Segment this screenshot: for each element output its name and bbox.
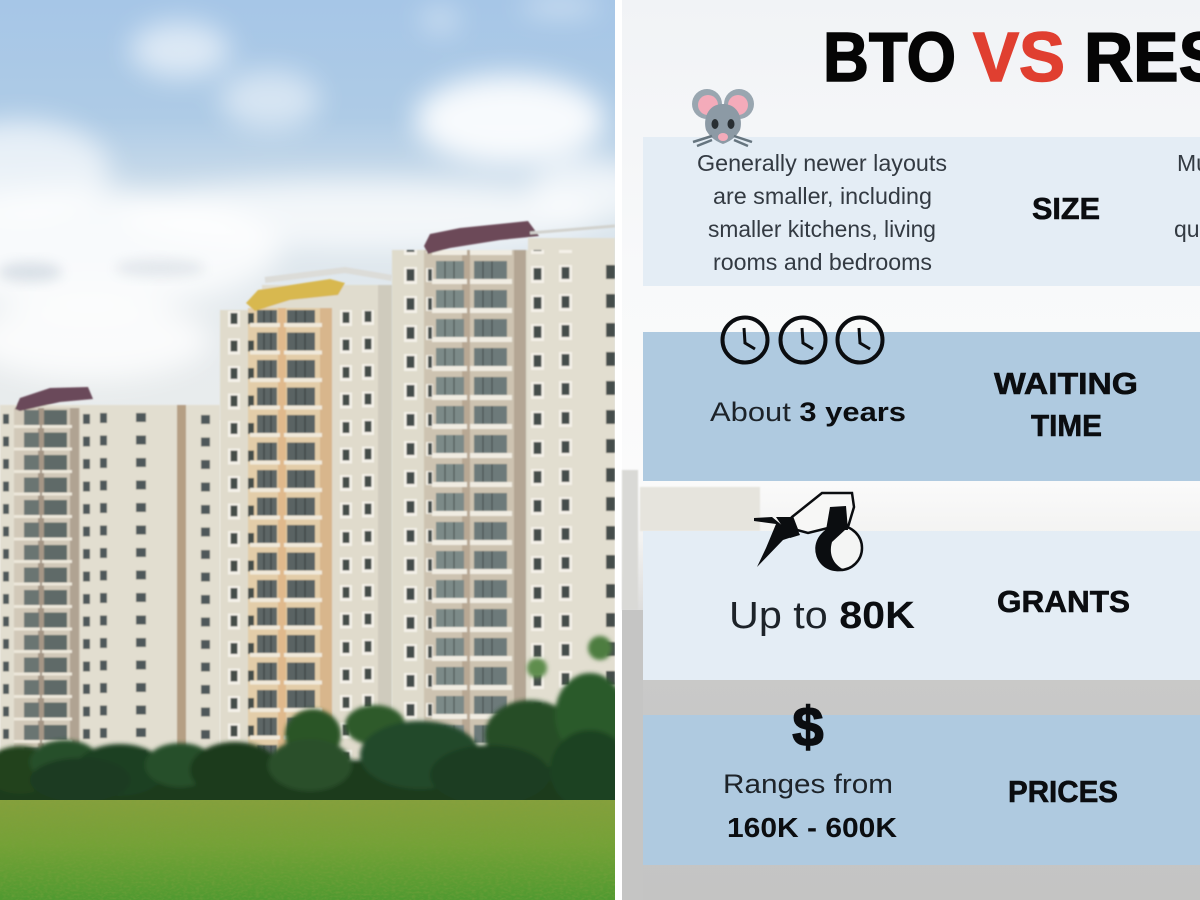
icon: dollar sign: $ <box>792 695 824 758</box>
text: waiting time BTO: About 3 years <box>710 397 906 427</box>
sky with clouds <box>0 0 650 420</box>
heading: waiting time <box>994 366 1138 443</box>
heading: grants: GRANTS <box>997 584 1130 619</box>
text: size BTO: smaller kitchens, living <box>708 216 936 242</box>
title: BTO <box>823 18 956 96</box>
row panel: grants <box>643 531 1200 680</box>
trees <box>0 636 630 810</box>
text: grants BTO: Up to 80K <box>729 595 916 637</box>
icon: mouse <box>692 89 754 146</box>
text: prices BTO: 160K - 600K <box>727 812 897 843</box>
text: size BTO <box>697 150 947 275</box>
text: size BTO: are smaller, including <box>713 183 932 209</box>
text: size resale (cropped) <box>1174 150 1200 242</box>
title <box>823 18 1200 96</box>
icon: hand holding money bag <box>754 493 862 571</box>
text: prices BTO <box>723 769 897 843</box>
tower block centre <box>220 270 392 760</box>
heading: prices: PRICES <box>1008 774 1118 809</box>
text: prices BTO: Ranges from <box>723 769 893 799</box>
icon: three clocks <box>722 318 882 362</box>
heading: waiting time: WAITING <box>994 366 1138 401</box>
heading: size: SIZE <box>1032 191 1100 226</box>
title: VS <box>973 18 1065 96</box>
text: size BTO: Generally newer layouts <box>697 150 947 176</box>
row panel: waiting time <box>643 332 1200 481</box>
row panel: size <box>643 137 1200 286</box>
row panel: prices <box>643 715 1200 865</box>
heading: waiting time: TIME <box>1031 408 1102 443</box>
tower block left <box>0 387 220 760</box>
tower block right <box>392 221 615 760</box>
photo: residential tower blocks <box>0 0 650 900</box>
grass field <box>0 800 615 900</box>
text: size BTO: rooms and bedrooms <box>713 249 932 275</box>
right panel background with faded photo <box>622 0 1200 900</box>
